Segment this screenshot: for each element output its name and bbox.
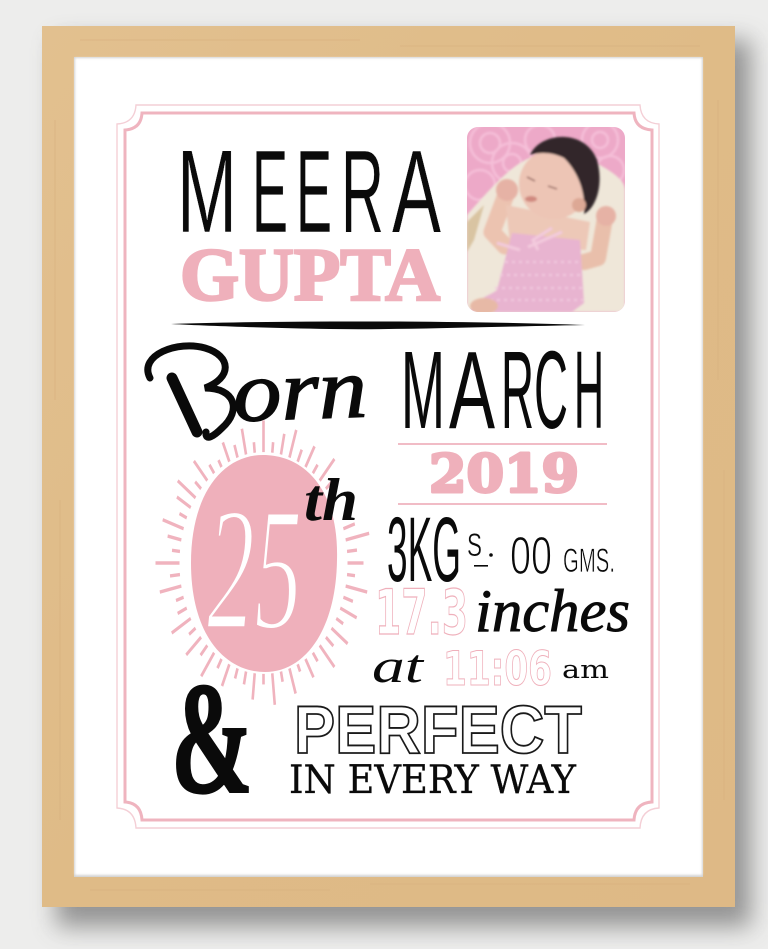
framed birth poster scene: H (574, 329, 604, 452)
surname: GUPTA (180, 234, 440, 317)
first name: E (296, 126, 332, 258)
word: MARCH: C (534, 329, 568, 452)
ampersand: & (171, 649, 253, 827)
time line: at (372, 640, 425, 693)
weight line: GMS. (563, 542, 615, 580)
word: Born: orn (231, 339, 369, 440)
length line (375, 576, 630, 649)
word: MARCH: R (501, 329, 534, 452)
decorative double border (117, 105, 659, 828)
time line: am (562, 655, 609, 684)
word: MARCH: M (401, 329, 445, 452)
year: 2019 (429, 444, 579, 505)
first name: R (341, 126, 384, 258)
tagline: IN EVERY WAY (289, 758, 577, 803)
baby fists (496, 179, 518, 201)
baby chest (506, 205, 590, 250)
weight line: 00 (510, 526, 552, 586)
first name: E (252, 126, 288, 258)
baby head (519, 149, 589, 219)
rule below year (398, 503, 607, 505)
word: PERFECT outlined: PERFECT (294, 692, 582, 768)
pink oval badge (191, 455, 337, 672)
weight line: 3KG (387, 499, 461, 601)
baby arms (492, 192, 507, 246)
length line: 17.3 (375, 576, 468, 649)
time line: 11:06 (443, 642, 552, 697)
word: MARCH: A (449, 329, 495, 452)
white mat (74, 57, 703, 877)
rule above year (398, 443, 607, 445)
first name: A (392, 126, 441, 258)
weight line: S (467, 527, 482, 563)
black divider stroke (171, 321, 585, 329)
ordinal th: th (304, 467, 358, 533)
first name: M (177, 126, 237, 258)
knit dress (470, 233, 584, 312)
sunburst rays (156, 420, 369, 705)
baby photo (465, 122, 625, 314)
day number 25: 25 (207, 472, 302, 667)
word: Born (148, 330, 369, 445)
length line: inches (475, 578, 630, 644)
time line (372, 640, 609, 697)
